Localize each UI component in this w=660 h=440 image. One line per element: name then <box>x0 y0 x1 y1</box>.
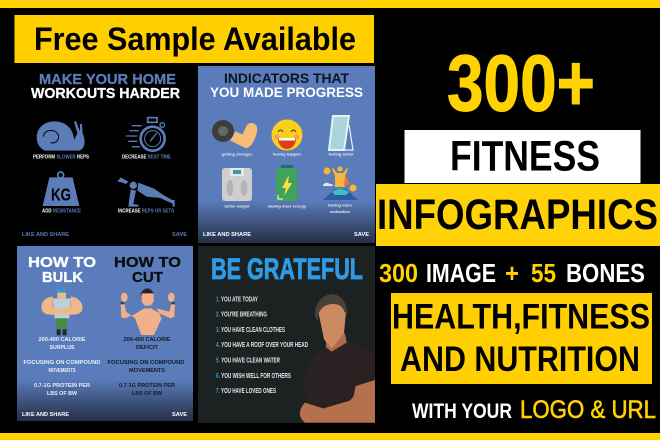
icon: happy face <box>272 120 302 150</box>
cut tips: DEFICIT <box>136 345 159 351</box>
cut heading: HOW TO <box>114 254 181 271</box>
panel 2 labels: feeling happier <box>273 152 302 156</box>
panel 2 labels: having more <box>328 202 353 208</box>
panel 2 title: INDICATORS THAT <box>224 70 349 86</box>
bulk heading: HOW TO <box>28 254 96 271</box>
be grateful heading: BE GRATEFUL <box>211 253 363 286</box>
panel 1 labels: INCREASE REPS OR SETS <box>118 208 175 214</box>
panel 2 labels: motivation <box>330 209 351 214</box>
panel 1 footer: SAVE <box>172 232 187 238</box>
portrait: muscular man <box>300 294 375 423</box>
gratitude list: 4. YOU HAVE A ROOF OVER YOUR HEAD <box>216 342 308 349</box>
icon: muscular bulking man <box>41 289 82 335</box>
banner: free sample available: Free Sample Available <box>34 21 356 57</box>
panel 3 footer <box>22 412 187 418</box>
panel 2 footer: SAVE <box>354 232 369 238</box>
bulk tips <box>24 337 101 397</box>
gratitude list: 1. YOU ATE TODAY <box>216 296 258 304</box>
icon: lean cutting man <box>121 288 175 335</box>
icon: motivation figure on mountain <box>323 166 358 200</box>
panel 1 labels: ADD RESISTANCE <box>42 208 82 214</box>
line: 300 image + 55 bones: IMAGE <box>426 258 496 288</box>
panel 1 labels: PERFORM SLOWER REPS <box>33 154 90 160</box>
bulk tips: SURPLUS <box>50 345 75 351</box>
cut tips: 0.7-1G PROTEIN PER <box>119 383 175 389</box>
top yellow bar <box>0 0 660 8</box>
panel: be grateful <box>198 246 375 423</box>
panel 2 footer <box>203 232 369 238</box>
panel 1 footer: LIKE AND SHARE <box>22 232 69 238</box>
panel 1 labels <box>33 154 175 214</box>
line: 300 image + 55 bones <box>379 258 645 288</box>
icon: kg weight <box>43 172 79 206</box>
cut tips: FOCUSING ON COMPOUND <box>108 360 185 366</box>
icon: battery with lightning <box>276 165 297 201</box>
bulk tips: 0.7-1G PROTEIN PER <box>34 383 90 389</box>
cut heading: CUT <box>132 269 163 286</box>
icon: kg weight: KG <box>51 184 71 204</box>
line: 300 image + 55 bones: 300 <box>379 258 418 288</box>
panel 2 labels <box>222 152 354 214</box>
cut tips: LBS OF BW <box>132 391 162 397</box>
panel 3 footer: LIKE AND SHARE <box>22 412 69 418</box>
panel: how to bulk, how to cut <box>17 246 193 421</box>
panel 2 title <box>210 70 363 100</box>
icon: snail <box>37 121 85 151</box>
panel 2 title: YOU MADE PROGRESS <box>210 84 363 100</box>
icon: stopwatch <box>126 118 165 151</box>
cut tips: 200-400 CALORIE <box>124 337 171 343</box>
panel 2 labels: having more energy <box>268 204 307 208</box>
line: 300 image + 55 bones: BONES <box>566 258 645 288</box>
panel 1 title: WORKOUTS HARDER <box>31 85 180 102</box>
line: with your logo and url: WITH YOUR <box>412 400 512 423</box>
gratitude list: 5. YOU HAVE CLEAN WATER <box>216 358 280 364</box>
cut tips <box>108 337 185 397</box>
bulk tips: 200-400 CALORIE <box>38 337 86 343</box>
bulk heading: BULK <box>42 269 83 286</box>
gratitude list <box>216 296 308 395</box>
panel 2 labels: getting stronger <box>222 152 253 156</box>
panel 3 footer: SAVE <box>172 412 187 418</box>
gratitude list: 3. YOU HAVE CLEAN CLOTHES <box>216 327 285 334</box>
icon: bathroom scale <box>222 168 252 201</box>
cut tips: MOVEMENTS <box>129 368 166 374</box>
panel: make your home workouts harder <box>22 71 187 238</box>
bulk tips: FOCUSING ON COMPOUND <box>24 360 101 366</box>
bulk tips: LBS OF BW <box>47 391 77 397</box>
line: 300 image + 55 bones: + <box>505 258 519 288</box>
panel 2 labels: feeling better <box>328 152 354 156</box>
panel 2 footer: LIKE AND SHARE <box>203 232 251 238</box>
panel 1 title: MAKE YOUR HOME <box>39 71 176 88</box>
panel 1 labels: DECREASE REST TIME <box>122 154 172 160</box>
line: with your logo and url <box>412 396 656 424</box>
box: fitness: FITNESS <box>450 132 600 180</box>
gratitude list: 2. YOU'RE BREATHING <box>216 312 267 318</box>
gratitude list: 6. YOU WISH WELL FOR OTHERS <box>216 373 291 380</box>
panel 2 labels: better weight <box>225 204 250 208</box>
panel: indicators that you made progress <box>198 66 375 243</box>
line: 300 image + 55 bones: 55 <box>531 258 556 288</box>
gratitude list: 7. YOU HAVE LOVED ONES <box>216 388 276 395</box>
icon: mirror <box>329 116 353 150</box>
bottom yellow bar <box>0 433 660 440</box>
bulk tips: MOVEMENTS <box>48 368 76 374</box>
icon: push-up figure <box>117 177 175 207</box>
headline: 300+: 300+ <box>447 38 595 128</box>
box: fitness <box>404 130 640 183</box>
icon: arm with weight plate <box>212 120 256 147</box>
panel 1 title <box>31 71 180 102</box>
panel 1 footer <box>22 232 187 238</box>
bulk heading <box>28 254 96 286</box>
cut heading <box>114 254 181 286</box>
box: health, fitness and nutrition <box>391 293 652 384</box>
